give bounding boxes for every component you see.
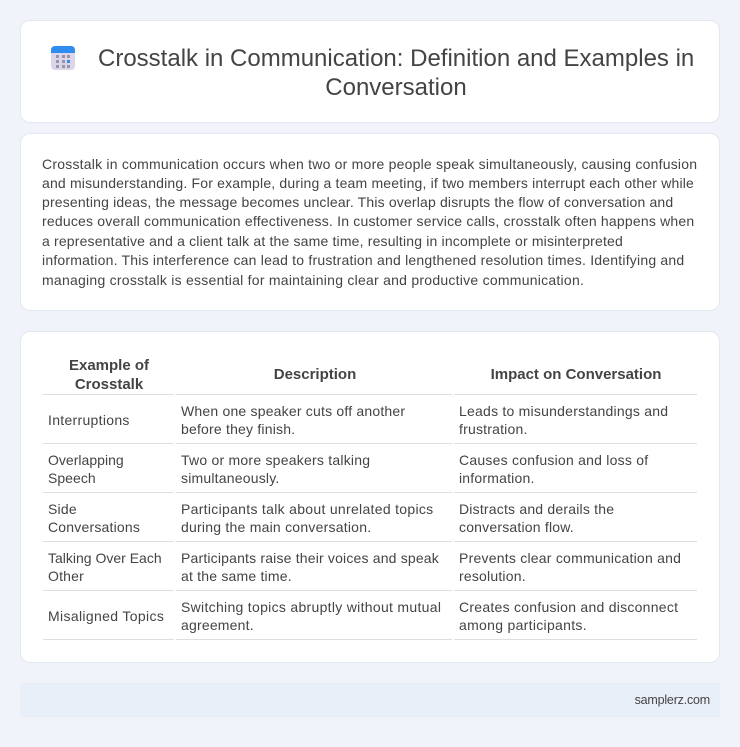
footer bar [20, 683, 720, 717]
panel: title card [20, 20, 720, 123]
panel: intro paragraph [20, 133, 720, 311]
table row: interruptions: Leads to misunderstandings and [459, 403, 668, 419]
table row: misaligned topics: Creates confusion and disconnect [459, 599, 678, 615]
table row: misaligned topics: among participants. [459, 617, 587, 633]
table row: misaligned topics: agreement. [181, 617, 254, 633]
text block: definition and examples: a representative and a client talk at the same time, resulting in incomplete or misinterpreted [42, 233, 623, 249]
table header row: Crosstalk [75, 376, 143, 393]
table row: misaligned topics [48, 599, 678, 633]
footer source text: samplerz.com [635, 693, 710, 707]
table row: interruptions: before they finish. [181, 421, 295, 437]
table row: interruptions [48, 403, 668, 437]
table row: side conversations: during the main conversation. [181, 519, 371, 535]
table row: misaligned topics: Switching topics abruptly without mutual [181, 599, 441, 615]
table row: overlapping speech: information. [459, 470, 535, 486]
table row: overlapping speech: Causes confusion and loss of [459, 452, 648, 468]
table row: side conversations [48, 501, 614, 535]
table row: talking over each other: resolution. [459, 568, 526, 584]
text block: definition and examples: reduces overall communication effectiveness. In customer service calls, crosstalk often happens when [42, 213, 694, 229]
table row: interruptions: When one speaker cuts off another [181, 403, 405, 419]
table row: side conversations: Side [48, 501, 77, 517]
table row: talking over each other: Other [48, 568, 84, 584]
table row: overlapping speech: simultaneously. [181, 470, 279, 486]
panel: crosstalk table [20, 331, 720, 663]
table row: interruptions: frustration. [459, 421, 528, 437]
table row: talking over each other: Talking Over Each [48, 550, 162, 566]
text block: definition and examples: and misunderstanding. For example, during a team meeting, if two members interrupt each other while [42, 175, 694, 191]
text block: definition and examples: managing crosstalk is essential for maintaining clear and productive communication. [42, 272, 584, 288]
table row: side conversations: Conversations [48, 519, 140, 535]
table header row: Example of [69, 357, 149, 374]
table row: overlapping speech: Speech [48, 470, 96, 486]
text block: definition and examples: presenting ideas, the message becomes unclear. This overlap disrupts the flow of conversation and [42, 194, 673, 210]
title: Crosstalk in Communication: Definition and Examples in [98, 45, 694, 72]
table row: talking over each other [48, 550, 681, 584]
title [98, 45, 694, 101]
table row: overlapping speech [48, 452, 648, 486]
table row: side conversations: Participants talk about unrelated topics [181, 501, 433, 517]
text block: definition and examples: information. This interference can lead to frustration and lengthened resolution times. Identifying and [42, 252, 684, 268]
table row: interruptions: Interruptions [48, 412, 130, 428]
table row: talking over each other: at the same time. [181, 568, 292, 584]
icon: calendar [51, 46, 75, 70]
text block: definition and examples [42, 156, 697, 288]
table header row: Description [274, 366, 356, 383]
table header row: Impact on Conversation [491, 366, 661, 383]
table row: side conversations: Distracts and derails the [459, 501, 614, 517]
table row: side conversations: conversation flow. [459, 519, 574, 535]
table row: overlapping speech: Overlapping [48, 452, 124, 468]
table row: misaligned topics: Misaligned Topics [48, 608, 164, 624]
table row: talking over each other: Prevents clear communication and [459, 550, 681, 566]
title: Conversation [325, 74, 467, 101]
text block: definition and examples: Crosstalk in communication occurs when two or more people speak simultaneously, causing confusion [42, 156, 697, 172]
table row: overlapping speech: Two or more speakers talking [181, 452, 370, 468]
table header row [69, 357, 661, 393]
table row: talking over each other: Participants raise their voices and speak [181, 550, 439, 566]
